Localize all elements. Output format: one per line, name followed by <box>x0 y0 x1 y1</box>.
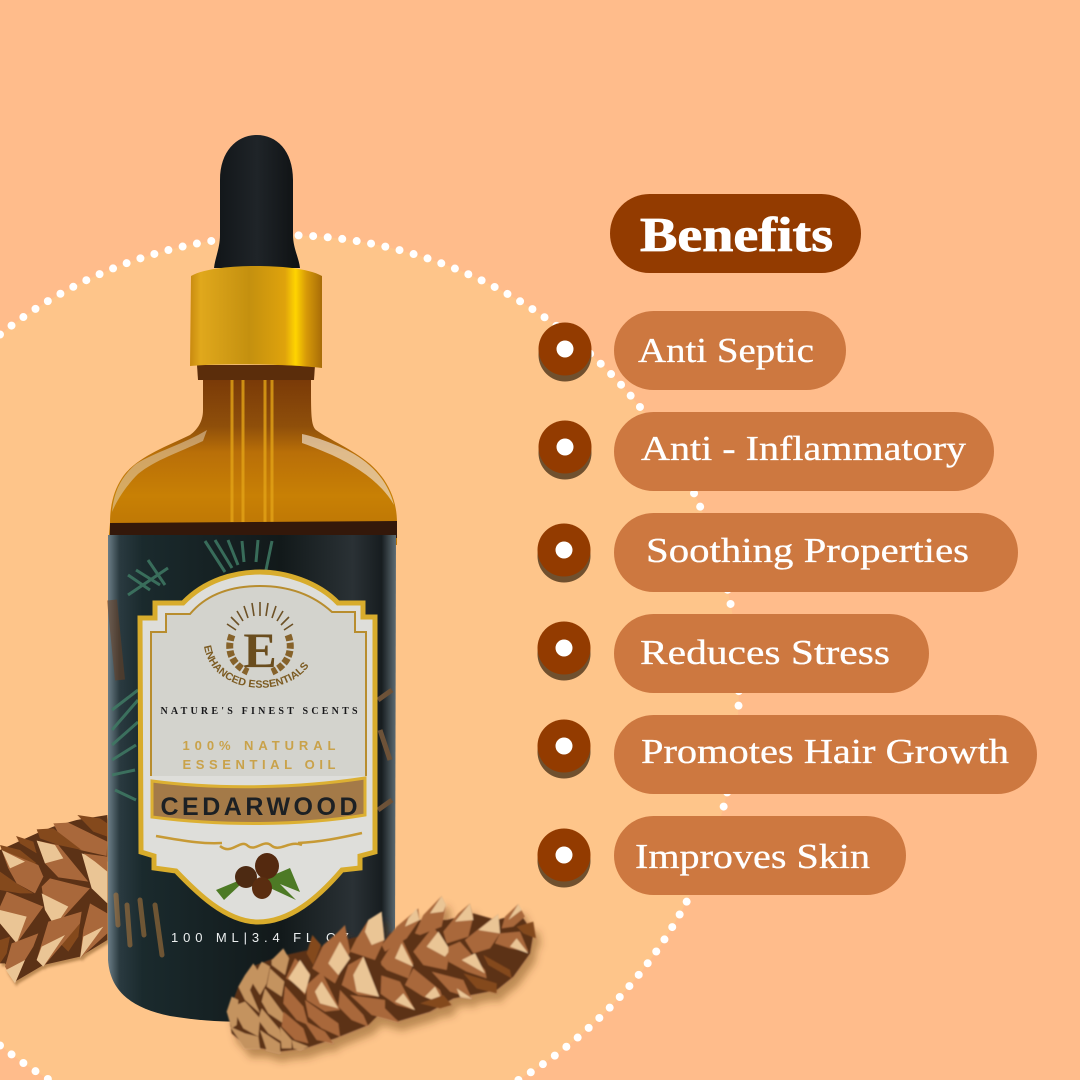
bullet icon <box>538 322 592 382</box>
pill label <box>614 816 906 895</box>
product name band <box>152 778 365 824</box>
pill label <box>614 715 1037 794</box>
tagline: NATURE'S FINEST SCENTS <box>160 706 358 717</box>
oil type: ESSENTIAL OIL <box>182 757 336 772</box>
bullet icon <box>538 828 590 888</box>
pine cone: front <box>227 896 536 1053</box>
foliage on wrapper <box>112 540 272 800</box>
pill label: Anti - Inflammatory <box>641 429 967 468</box>
pill label <box>614 513 1018 592</box>
benefit: Anti - Inflammatory <box>538 412 994 491</box>
bullet icon <box>538 622 590 680</box>
pill label <box>614 412 994 491</box>
bullet icon <box>538 720 590 778</box>
dark label wrapper <box>108 535 396 1022</box>
oil type: 100% NATURAL <box>182 738 336 753</box>
pine cone: left, behind bottle <box>0 815 107 983</box>
flourish <box>156 833 362 849</box>
pill label <box>614 614 929 693</box>
base half of cone <box>227 912 385 1053</box>
volume text: 100 ML|3.4 FL OZ <box>171 930 349 945</box>
neck ring <box>197 365 315 380</box>
benefit: Anti Septic <box>538 311 846 390</box>
benefit: Reduces Stress <box>538 614 929 693</box>
pill label: Improves Skin <box>635 837 870 876</box>
benefit: Promotes Hair Growth <box>538 715 1037 794</box>
heading: Benefits: Benefits <box>640 207 833 262</box>
oil type <box>182 738 336 772</box>
mini cones illustration <box>216 853 300 900</box>
pill label: Anti Septic <box>638 331 814 370</box>
pill label: Soothing Properties <box>646 531 969 570</box>
oil line <box>110 521 397 538</box>
cream label panel <box>140 572 375 922</box>
bullet icon <box>538 524 590 582</box>
benefit: Soothing Properties <box>538 513 1018 592</box>
pill label: Reduces Stress <box>640 633 890 672</box>
shoulder highlights <box>112 430 207 512</box>
tip half of cone <box>375 896 536 1023</box>
gold collar <box>190 266 322 368</box>
pill label: Promotes Hair Growth <box>641 732 1010 771</box>
product name band: CEDARWOOD <box>160 793 358 821</box>
bottle glass <box>108 380 397 545</box>
benefit: Improves Skin <box>538 816 906 895</box>
brand emblem: ENHANCED ESSENTIALS <box>204 645 308 688</box>
dropper bulb <box>214 135 300 268</box>
bullet icon <box>538 420 592 480</box>
dropper tube <box>232 380 272 522</box>
heading: Benefits <box>610 194 861 273</box>
product bottle <box>107 135 397 1022</box>
brand emblem <box>204 602 308 688</box>
brand emblem: E <box>243 622 277 678</box>
pill label <box>614 311 846 390</box>
dotted circle backdrop <box>0 235 739 1080</box>
